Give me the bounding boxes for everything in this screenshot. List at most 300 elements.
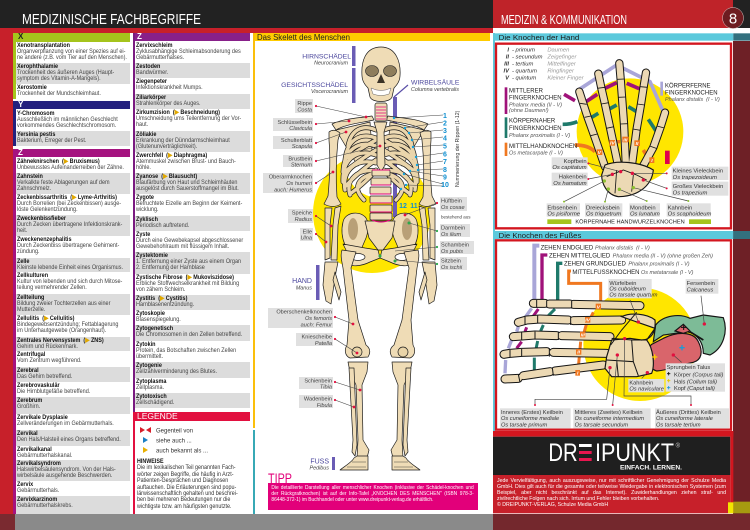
foot phalanx labels: ZEHEN MITTELGLIED: [549, 254, 611, 260]
entry: Mutterzelle.: [17, 306, 45, 313]
entry: Zwerchfell (▶ Diaphragma): [136, 152, 207, 159]
hand legend of digits: [503, 48, 585, 82]
purple bars and region labels: Columna vertebralis: [411, 87, 459, 93]
page number badge: [722, 8, 744, 28]
entry: Zweckenbissfieber: [17, 215, 66, 222]
skeleton marker dots: [315, 105, 438, 408]
legend notes: Patienten-Gesprächen und Diagnosen: [137, 477, 228, 484]
rib numbers: 2: [443, 120, 447, 128]
entry: Zervikalkanal: [17, 446, 52, 453]
entry: Verkalkte feste Ablagerungen auf dem: [17, 179, 110, 186]
rail cyan right: [493, 33, 495, 431]
entry: Zweckenenzephalitis: [17, 236, 71, 243]
rib numbers: 9: [443, 174, 447, 182]
rib numbers: Nummerierung der Rippen (1-12): [455, 110, 461, 187]
skeleton bone labels: auch: Femur: [301, 322, 333, 328]
entry: [16, 337, 130, 351]
entry: löste Gelenkentzündung.: [17, 206, 78, 213]
entry: Bildung zweier Tochterzellen aus einer: [17, 300, 110, 307]
foot tarsal labels: [500, 279, 729, 428]
hand carpal labels: Os lunatum: [630, 211, 660, 217]
hand finger bone labels: FINGERKNOCHEN: [509, 95, 562, 101]
skeleton bone labels: Tibia: [320, 384, 332, 390]
skeleton leader lines and dots: [316, 106, 443, 407]
foot phalanx labels: Phalanx media (II - V) (ohne großen Zeh): [613, 254, 713, 260]
foot tarsal labels: Würfelbein: [609, 281, 636, 287]
skeleton bone labels: Sternum: [291, 162, 312, 168]
logo block: EINFACH. LERNEN.: [620, 465, 682, 472]
skeleton bone labels: Darmbein: [441, 226, 465, 232]
entry: Yersinia pestis: [17, 131, 55, 138]
foot tarsal labels: Os cuneiforme laterale: [656, 416, 713, 422]
metatarsal number tags: V: [597, 304, 601, 310]
foot yellow disc: [583, 288, 697, 401]
hand frame: [496, 44, 731, 228]
foot leader lines: [534, 296, 706, 406]
entry: Zyste: [136, 231, 150, 238]
entry: [16, 367, 130, 382]
red left edge strip: [0, 33, 13, 514]
entry: Zytoplasma: [136, 378, 166, 385]
entry: [135, 325, 250, 341]
foot tarsal labels: Os tarsale secundum: [575, 422, 628, 428]
heading Z: Z: [18, 148, 23, 157]
foot frame: [496, 240, 731, 430]
entry: [16, 236, 130, 258]
finger number tags: IV: [610, 141, 615, 147]
legend notes: wichtigste bzw. am häufigsten genutzte.: [137, 503, 232, 510]
logo block: ®: [676, 443, 681, 450]
entry: Zerebrum: [17, 397, 42, 404]
skeleton bone labels: Speiche: [292, 210, 312, 216]
purple bars and region labels: Manus: [296, 286, 312, 292]
heading Y: [16, 101, 130, 109]
foot tarsal labels: Fersenbein: [687, 281, 715, 287]
entry: Zytotoxisch: [136, 393, 167, 400]
entry: Zygote: [136, 194, 154, 201]
heading hand: Die Knochen der Hand: [499, 33, 579, 42]
legend notes: lärwissenschaftlich gehalten und beschrei-: [137, 490, 238, 497]
rib numbers: 7: [443, 159, 447, 166]
entry: Xerophthalamie: [17, 63, 58, 70]
entry: Blasenspiegelung.: [136, 316, 181, 323]
rail purple column two: [133, 33, 135, 412]
hand carpal labels: Hakenbein: [559, 175, 587, 181]
hand carpal labels: Kahnbein: [668, 205, 692, 211]
entry: [135, 274, 250, 295]
entry: Die Chromosomen in den Zellen betreffend.: [136, 331, 242, 338]
entry: Bandwürmer.: [136, 69, 168, 76]
red rule under left header: [0, 28, 493, 33]
foot tarsal labels: Os cuneiforme intermedium: [575, 416, 644, 422]
entry: [135, 109, 250, 131]
hand carpal labels: Os capitatum: [552, 165, 587, 171]
entry: [135, 94, 250, 109]
foot tarsal labels: Os tarsale tertium: [656, 422, 701, 428]
purple bars and region labels: Neurocranium: [314, 60, 349, 66]
entry: Strahlenkörper des Auges.: [136, 100, 201, 107]
entry: Ziegenpeter: [136, 78, 167, 85]
purple bars and region labels: HAND: [292, 278, 312, 285]
title left: MEDIZINISCHE FACHBEGRIFFE: [22, 12, 201, 28]
legend icons: siehe auch ...: [156, 438, 192, 444]
legend notes: [137, 458, 238, 510]
entry: [16, 42, 130, 63]
rib numbers: 12: [399, 203, 407, 210]
hand legend of digits: Ringfinger: [547, 69, 575, 75]
legend notes: Die im lexikalischen Teil genannten Fach-: [137, 464, 236, 471]
entry: haut.: [136, 121, 148, 128]
legend notes: auftauchen. Die Erläuterungen sind popu-: [137, 484, 236, 491]
heading foot: Die Knochen des Fußes: [499, 231, 582, 240]
hand finger bone labels: Phalanx media (II - V): [509, 102, 562, 108]
hand legend of digits: IV: [503, 69, 510, 75]
rib numbers: 8: [443, 167, 447, 174]
entry: [16, 131, 130, 146]
entry: teilung vermehrender Zellen.: [17, 284, 87, 291]
foot tarsal labels: Inneres (Erstes) Keilbein: [501, 410, 563, 416]
skeleton bone labels: Brustbein: [288, 156, 312, 162]
entry: übermittelt.: [136, 353, 163, 360]
entry: Ziliarkörper: [136, 94, 166, 101]
hand finger bone labels: FINGERKNOCHEN: [509, 126, 562, 132]
entry: Erbliche Stoffwechselkrankheit mit Bildung: [136, 280, 239, 287]
skeleton bone labels: Schambein: [441, 242, 469, 248]
hand carpal labels: Dreiecksbein: [586, 205, 620, 211]
rail teal centre: [253, 430, 255, 514]
small code tag: [728, 502, 750, 513]
skeleton bone labels: Schulterblatt: [281, 138, 312, 144]
entry: Gehirn und Rückenmark.: [17, 343, 78, 350]
hand carpal labels: Kleines Vieleckbein: [673, 169, 723, 175]
skeleton bone labels: bestehend aus: [441, 214, 471, 220]
entry: Zeckenbissarthritis (▶ Lyme-Arthritis): [17, 194, 117, 201]
metatarsal number tags: IV: [585, 318, 591, 324]
entry: Zerebral: [17, 367, 39, 374]
entry: Das Gehirn betreffend.: [17, 373, 72, 380]
entry: Zystische Fibrose (▶ Mukoviszidose): [136, 274, 234, 281]
hand finger bone labels: Phalanx distalis (I - V): [665, 97, 720, 103]
entry: Zervix: [17, 481, 33, 488]
hand finger bone labels: MITTELHANDKNOCHEN: [509, 144, 577, 150]
entry: Zentrifugal: [17, 351, 45, 358]
entry: Harnblasenentzündung.: [136, 301, 194, 308]
foot tarsal labels: Os naviculare: [629, 387, 664, 393]
foot tarsal labels: Körper (Corpus tali): [674, 372, 723, 378]
rail magenta: [13, 149, 16, 514]
heading Y: Y: [18, 100, 23, 109]
hand finger bone labels: [505, 82, 720, 164]
entry: Zervikale Dysplasie: [17, 414, 68, 421]
entry: Trockenheit des äußeren Auges (Haupt-: [17, 69, 114, 76]
hand carpal labels: KÖRPERNAHE HANDWURZELKNOCHEN: [575, 219, 685, 226]
hand legend of digits: III: [504, 62, 509, 68]
foot skeleton: [504, 300, 655, 382]
entry: Zervixschleim: [136, 42, 173, 49]
entry: [135, 173, 250, 194]
entry: [16, 382, 130, 397]
hand legend of digits: - quartum: [512, 69, 537, 75]
entry: [16, 446, 130, 460]
rib numbers: 11: [410, 203, 418, 210]
entry: Unbewusstes Aufeinanderreiben der Zähne.: [17, 164, 124, 171]
entry: [135, 194, 250, 216]
rib numbers: 4: [443, 136, 447, 142]
heading foot: [493, 231, 750, 240]
hand colour arcs: [563, 65, 663, 157]
entry: Ausschließlich im männlichen Geschlecht: [17, 116, 118, 123]
heading X: X: [18, 32, 23, 41]
hand carpal labels: Kopfbein: [564, 159, 587, 165]
hand carpal labels: Os trapezoideum: [673, 175, 717, 181]
foot phalanx labels: Phalanx distalis (I - V): [595, 246, 650, 252]
hand carpal labels: Erbsenbein: [547, 205, 577, 211]
entry: [135, 341, 250, 362]
hand finger bone labels: FINGERKNOCHEN: [665, 90, 718, 96]
skeleton bone labels: Radius: [295, 217, 312, 223]
legend icons: [140, 427, 208, 454]
right dark red edge column: [733, 41, 750, 514]
skeleton bone labels: Os coxae: [441, 205, 465, 211]
heading Z: [16, 149, 130, 157]
entry: [16, 258, 130, 272]
skeleton bone labels: Kniescheibe: [302, 334, 332, 340]
entry: [135, 231, 250, 252]
entry: [135, 295, 250, 310]
hand legend of digits: - secundum: [512, 55, 543, 61]
heading Z column 2: Z: [137, 32, 142, 41]
foot tarsal labels: Os cuneiforme mediale: [501, 416, 559, 422]
entry: Gebärmutterhalses.: [136, 54, 184, 61]
panel: hand bones: [493, 33, 750, 228]
hand carpal labels: Os pisiforme: [547, 211, 581, 217]
entry: Zytogenie: [136, 362, 162, 369]
right header red band: [493, 0, 733, 28]
foot tarsal labels: Os tarsale primum: [501, 422, 547, 428]
entry: Zellschädigend.: [136, 399, 174, 406]
entry: Zervikal: [17, 430, 38, 437]
hand legend of digits: II: [506, 55, 509, 61]
bottom band left: [0, 514, 15, 530]
hand skeleton: [579, 63, 665, 197]
hand finger bone labels: Phalanx proximalis (I - V): [509, 133, 570, 139]
entry: [16, 414, 130, 430]
entry: Den Hals/Halsteil eines Organs betreffend.: [17, 436, 121, 443]
hand finger bone labels: MITTLERER: [509, 89, 544, 95]
skeleton bone labels: Os femoris: [305, 316, 332, 322]
hand finger bone labels: (ohne Daumen!): [509, 108, 549, 114]
bottom band: [0, 514, 750, 530]
entry: [16, 272, 130, 294]
hand legend of digits: Daumen: [547, 48, 569, 54]
colour rails: [13, 33, 16, 514]
hand carpal labels: Mondbein: [630, 205, 656, 211]
entry: Periodisch auftretend.: [136, 222, 189, 229]
heading skeleton: Das Skelett des Menschen: [257, 33, 350, 42]
entry: Atemmuskel zwischen Brust- und Bauch-: [136, 158, 236, 165]
foot tarsal labels: Os cuboideum: [609, 287, 646, 293]
entry: [135, 78, 250, 94]
foot tarsal labels: Sprungbein Talus: [667, 365, 710, 371]
logo block: DR: [548, 440, 578, 467]
skeleton bone labels: Patella: [315, 341, 332, 347]
skeleton bone labels: Os humeri: [286, 181, 313, 187]
entry: Y-Chromosom: [17, 110, 54, 117]
entry: heit.: [17, 227, 27, 234]
legend heading: [135, 412, 250, 421]
skeleton bone labels: Ulna: [300, 236, 312, 242]
entry: [135, 252, 250, 274]
logo block: IPUNKT: [595, 440, 674, 467]
foot colour brackets: [505, 246, 601, 375]
foot phalanx labels: ZEHEN ENDGLIED: [541, 246, 594, 252]
entry: Zervikalsyndrom: [17, 460, 61, 467]
finger number tags: V: [598, 150, 602, 156]
entry: [135, 131, 250, 152]
entry: Infektionskrankheit Mumps.: [136, 84, 203, 91]
entry: [16, 63, 130, 84]
entry: Zellteilung: [17, 294, 44, 301]
entry: wicklung.: [136, 206, 159, 213]
rib numbers: 6: [443, 152, 447, 158]
foot tarsal labels: Kopf (Caput tali): [674, 386, 715, 392]
entry: Durch Zeckenbiss übertragene Gehirnent-: [17, 242, 119, 249]
entry: Zystektomie: [136, 252, 168, 259]
finger number tags: III: [623, 137, 628, 143]
hand finger bone labels: Os metacarpale (I - V): [509, 151, 563, 157]
logo block: [493, 431, 733, 513]
entry: [135, 216, 250, 231]
entry: Zahnstein: [17, 173, 43, 180]
entry: [135, 152, 250, 173]
entry: [16, 294, 130, 315]
hand carpal labels: Os trapezium: [673, 190, 707, 196]
skeleton bone labels: Schlüsselbein: [277, 120, 312, 126]
tipp text box: Die detaillierte Darstellung aller menschlicher Knochen (inklusive der Schädel-knochen und der Rückgratknochen) ist auf der Info-Tafel „KNOCHEN DES MENSCHEN" (ISBN 978-3-86448-372-1) im Buchhandel oder unter www.dreipunkt-verlag.de erhältlich.: [271, 484, 474, 503]
tipp heading: TIPP: [268, 470, 292, 486]
skeleton bone labels: Rippe: [297, 101, 312, 107]
entry: Protein, das Botschaften zwischen Zellen: [136, 347, 236, 354]
hand finger bone labels: KÖRPERNAHER: [509, 118, 556, 125]
entry: [16, 496, 130, 514]
page number badge: 8: [729, 10, 737, 28]
rib numbers: 1: [443, 113, 447, 120]
legend icons: Gegenteil von: [156, 428, 193, 434]
entry: [16, 84, 130, 99]
entry: höhle.: [136, 164, 151, 171]
skeleton bone labels: Costa: [297, 108, 312, 114]
hand legend of digits: - primum: [512, 48, 535, 54]
foot phalanx labels: [541, 246, 713, 276]
entry: [135, 42, 250, 63]
skeleton bone labels: [263, 99, 474, 409]
rib numbers: 10: [441, 182, 449, 189]
hand carpal labels: [547, 157, 728, 226]
red rule above logo: [493, 431, 733, 437]
rib numbers: 5: [443, 144, 447, 150]
legal red block: [493, 475, 730, 513]
entry: Xenotransplantation: [17, 42, 70, 49]
rib numbers: 3: [443, 128, 447, 135]
entry: Durch eine Gewebekapsel abgeschlossener: [136, 237, 243, 244]
hand carpal labels: Os hamatum: [553, 181, 587, 187]
entry: Blaufärbung von Haut und Schleimhäuten: [136, 179, 237, 186]
foot phalanx labels: Os metatarsale (I - V): [641, 270, 694, 276]
hand legend of digits: - tertium: [512, 62, 534, 68]
entry: Zytoskopie: [136, 310, 165, 317]
legal text: © DREIPUNKT-VERLAG, Schulze Media GmbH: [497, 502, 608, 508]
skeleton bone labels: auch: Humerus: [274, 188, 312, 194]
entry: Gewebehohlraum mit flüssigem Inhalt.: [136, 243, 229, 250]
entry: symptom des Vitamin-A-Mangels).: [17, 75, 101, 82]
entry: ausgelöst durch Sauerstoffmangel im Blut.: [136, 185, 239, 192]
entry: Kleinste lebende Einheit eines Organismus.: [17, 264, 123, 271]
hand legend of digits: I: [507, 48, 509, 54]
legend notes: wörter zeigen Begriffe, die häufig in Arzt-: [137, 471, 233, 478]
metatarsal number tags: II: [577, 350, 581, 356]
foot tarsal labels: Calcaneus: [687, 288, 714, 294]
entry: Zellveränderungen im Gebärmutterhals.: [17, 420, 114, 427]
entry: von zähem Schleim.: [136, 286, 185, 293]
finger number tags: II: [636, 141, 639, 147]
skeleton figure: [313, 47, 437, 470]
entry: [16, 430, 130, 446]
skeleton bone labels: Os ischii: [441, 265, 463, 271]
skeleton bone labels: Elle: [303, 230, 312, 236]
entry: Zystitis (▶ Cystitis): [136, 295, 187, 302]
entry: Die Hirnblutgefäße betreffend.: [17, 388, 90, 395]
heading X: [16, 33, 130, 42]
skeleton bone labels: Schienbein: [304, 378, 332, 384]
entry: Zähneknirschen (▶ Bruxismus): [17, 158, 100, 165]
entry: 2. Entfernung der Harnblase: [136, 264, 205, 271]
entry: [16, 158, 130, 173]
entry: [135, 378, 250, 393]
tipp text box: [268, 483, 478, 510]
entry: Zyklusabhängige Schleimabsonderung des: [136, 48, 241, 55]
entry: Xerostomie: [17, 84, 47, 91]
entry: [16, 315, 130, 337]
skeleton bone labels: Oberschenkelknochen: [276, 310, 332, 316]
entry: Zellplasma.: [136, 384, 164, 391]
skeleton bone labels: Os pubis: [441, 249, 463, 255]
skeleton bone labels: Sitzbein: [441, 258, 461, 264]
entry: vorkommendes Geschlechtschromosom.: [17, 122, 116, 129]
entry: [16, 481, 130, 496]
foot phalanx labels: MITTELFUSSKNOCHEN: [572, 270, 640, 276]
entry: (Glutenunverträglichkeit).: [136, 143, 197, 150]
skeleton bone labels: Hüftbein: [441, 198, 462, 204]
entry: Zerebrovaskulär: [17, 382, 60, 389]
entry: Zestoden: [136, 63, 160, 70]
entry: wirbelsäule ausgehende Beschwerden.: [17, 472, 112, 479]
rib numbers: [399, 110, 461, 210]
hand legend of digits: Mittelfinger: [547, 62, 577, 68]
entry: im Unterhautgewebe (Orangenhaut).: [17, 327, 106, 334]
entry: Zyanose (▶ Blausucht): [136, 173, 197, 180]
entry: Zervixkarzinom: [17, 496, 57, 503]
metatarsal number tags: I: [577, 371, 579, 377]
entry: Gebärmutterhalskanal.: [17, 452, 72, 459]
foot hind bones green and red: [648, 315, 725, 371]
entry: Kultur von lebenden und sich durch Mitose-: [17, 278, 122, 285]
entry: Durch Borrelien (bei Zeckenbissen) ausge-: [17, 200, 121, 207]
purple bars and region labels: Pedibus: [310, 466, 329, 472]
entry: Zytokin: [136, 341, 155, 348]
purple bars and region labels: Viscerocranium: [311, 89, 348, 95]
rail green: [13, 33, 16, 99]
hand legend of digits: Zeigefinger: [546, 55, 578, 61]
